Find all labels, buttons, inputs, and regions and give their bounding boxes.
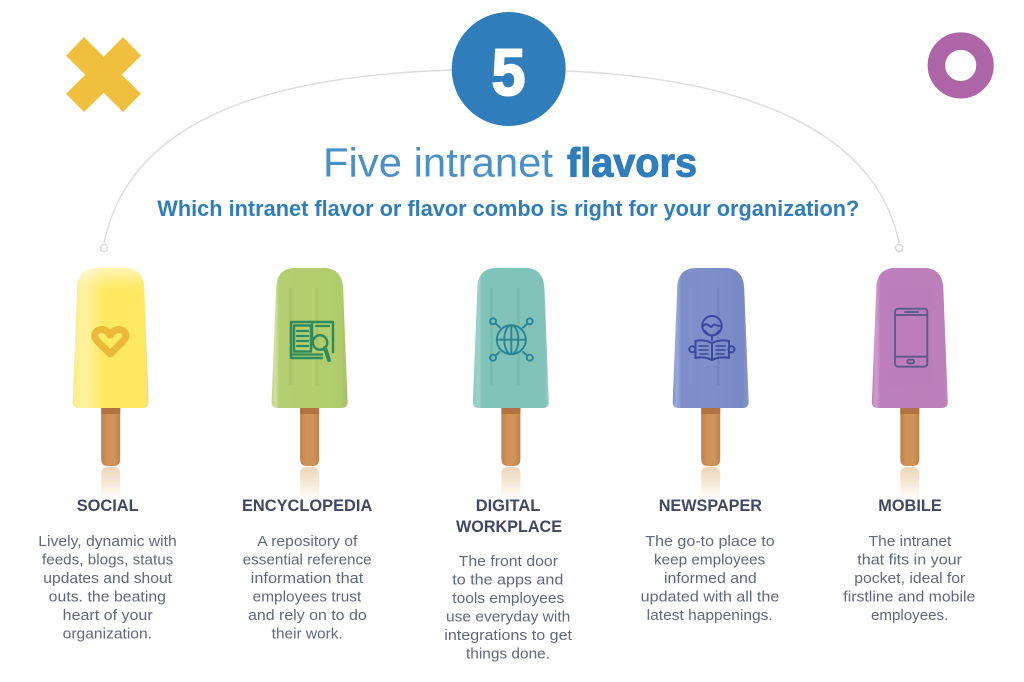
description: outs. the beating [49, 588, 166, 606]
description: updates and shout [43, 570, 173, 587]
title [323, 140, 697, 186]
column: digital workplace [444, 497, 573, 662]
popsicle: mobile [872, 268, 948, 499]
popsicle: newspaper [673, 268, 749, 499]
icon: yellow cross [66, 37, 141, 112]
icon: purple ring [936, 41, 985, 90]
description: organization. [63, 626, 152, 642]
description: integrations to get [444, 627, 573, 644]
ice body [673, 268, 749, 408]
description: information that [251, 570, 364, 587]
number badge [452, 12, 566, 126]
heading: MOBILE [878, 497, 942, 515]
popsicle: social [73, 268, 149, 499]
description: Lively, dynamic with [38, 533, 177, 550]
description: to the apps and [452, 572, 563, 588]
description: latest happenings. [647, 607, 773, 624]
popsicle: digital workplace [473, 268, 549, 499]
stick reflection [101, 467, 120, 499]
arc connector: right [566, 71, 903, 252]
number badge: 5 [492, 35, 526, 109]
description: feeds, blogs, status [42, 552, 173, 568]
description [444, 553, 573, 662]
popsicle: encyclopedia [272, 268, 348, 499]
description [243, 533, 372, 642]
icon: heart [95, 330, 126, 354]
column: social [38, 497, 177, 642]
column: newspaper [641, 497, 779, 624]
description: that fits in your [857, 552, 962, 568]
icon: smartphone [895, 309, 927, 367]
description: The intranet [869, 533, 952, 550]
stick reflection [300, 467, 319, 499]
description: use everyday with [446, 608, 570, 626]
description: The go-to place to [645, 533, 775, 550]
description: their work. [272, 626, 343, 642]
description: updated with all the [641, 588, 779, 606]
heading: DIGITAL [476, 497, 540, 515]
ice body [473, 268, 549, 408]
icon: globe network [490, 318, 533, 361]
stick [300, 408, 319, 466]
ice body [872, 268, 948, 408]
stick reflection [501, 467, 520, 499]
description [641, 533, 779, 624]
arc connector: left [100, 70, 452, 252]
heading: NEWSPAPER [659, 497, 762, 515]
ice body [272, 268, 348, 408]
heading: WORKPLACE [456, 518, 562, 536]
description: A repository of [257, 533, 358, 550]
subtitle: Which intranet flavor or flavor combo is right for your organization? [157, 196, 859, 221]
heading: ENCYCLOPEDIA [242, 497, 372, 515]
stick reflection [701, 467, 720, 499]
description: and rely on to do [248, 607, 367, 624]
column: mobile [843, 497, 975, 624]
description: keep employees [654, 552, 765, 568]
description: things done. [466, 646, 550, 662]
description: tools employees [452, 590, 564, 607]
description: employees. [871, 607, 948, 624]
column: encyclopedia [242, 497, 372, 642]
stick [501, 408, 520, 466]
stick reflection [900, 467, 919, 499]
description: informed and [664, 570, 757, 587]
ice body [73, 268, 149, 408]
stick [900, 408, 919, 466]
stick [101, 408, 120, 466]
description: employees trust [253, 588, 362, 606]
description: pocket, ideal for [854, 570, 965, 587]
stick [701, 408, 720, 466]
heading [456, 497, 562, 536]
description [843, 533, 975, 624]
description: essential reference [243, 552, 372, 568]
title: Five intranet [323, 140, 554, 186]
description [38, 533, 177, 642]
icon: person reading newspaper [689, 316, 734, 360]
description: The front door [459, 553, 558, 570]
description: heart of your [63, 607, 153, 624]
description: firstline and mobile [843, 588, 975, 606]
title: flavors [567, 140, 697, 186]
heading: SOCIAL [77, 497, 139, 515]
icon: book with magnifier [291, 322, 333, 360]
